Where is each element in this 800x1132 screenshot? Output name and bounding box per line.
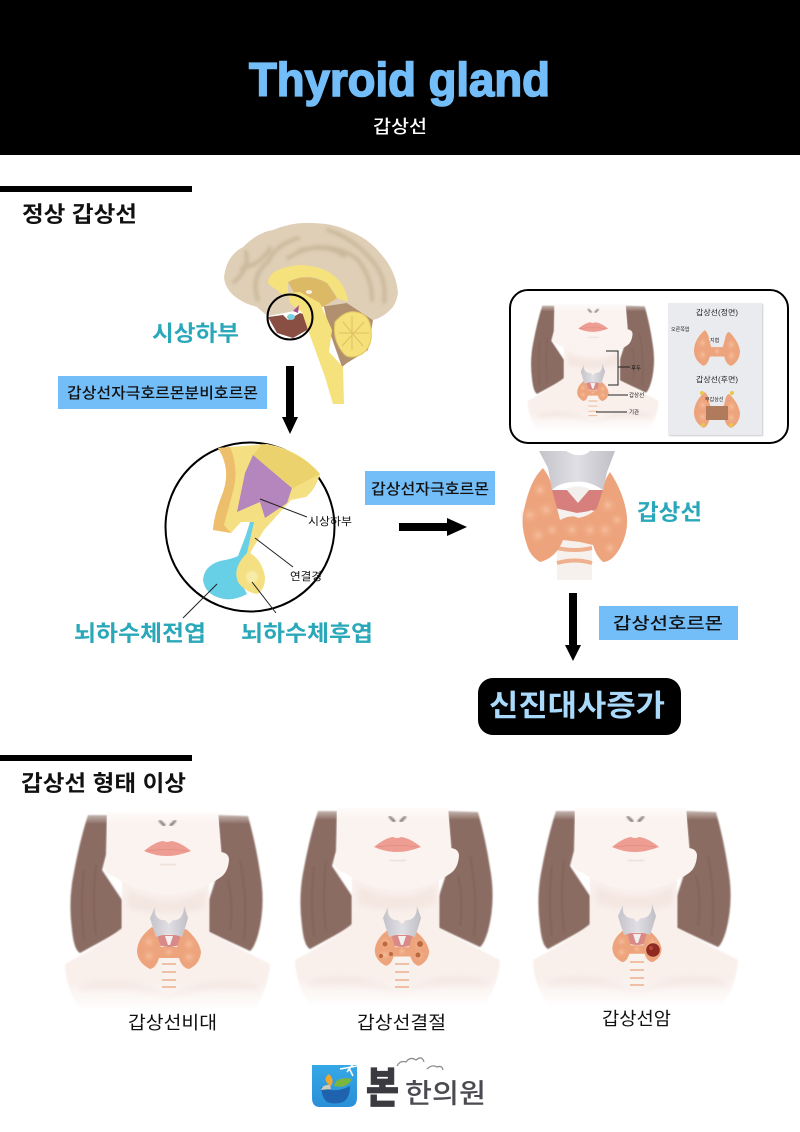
pituitary and stalk [203,444,320,599]
hormone box: TSH: 갑상선자극호르몬 [371,481,489,498]
illustration: brain [224,223,398,404]
hormone box: TRH: 갑상선자극호르몬분비호르몬 [67,385,258,402]
label: posterior pituitary: 뇌하수체후엽 [241,621,373,646]
label: hypothalamus small: 시상하부 [308,514,352,528]
wordmark: 본 [366,1065,399,1113]
panel: thyroid location inset [510,290,788,443]
panel: magnified pituitary circle [166,442,352,618]
panel: front and back views: 부갑상선 [705,396,724,403]
label: thyroid: 갑상선 [637,500,702,525]
callout: metabolism increase [478,678,681,735]
neck figure [518,300,672,432]
panel: front and back views: 지협 [710,337,719,344]
section heading: normal thyroid [0,186,192,227]
illustration: enlarged thyroid [520,451,627,580]
leader lines [183,499,307,618]
panel: thyroid location inset: 기관 [629,408,639,416]
icon: bowl with leaves [312,1064,357,1107]
section heading: thyroid abnormalities [0,755,192,796]
section heading: normal thyroid: 정상 갑상선 [22,202,137,227]
subtitle: 갑상선 [373,117,427,137]
arrow: down to metabolism [565,593,581,661]
hormone box: TSH [365,471,495,505]
hormone box: thyroid hormone: 갑상선호르몬 [613,614,723,633]
label: goiter: 갑상선비대 [128,1013,217,1033]
title: Thyroid gland [249,53,550,106]
panel: front and back views: 오른쪽엽 [671,326,689,333]
label: nodule: 갑상선결절 [357,1013,446,1033]
panel: front and back views [668,303,763,436]
section heading: thyroid abnormalities: 갑상선 형태 이상 [21,771,186,796]
pointer circle [268,294,312,340]
panel: thyroid location inset: 갑상선 [629,391,644,399]
label: hypothalamus: 시상하부 [152,321,239,346]
arrow: down to pituitary [282,366,298,434]
logo: 한의원 [405,1079,486,1109]
figure: nodule [280,802,520,1008]
logo [312,1058,486,1113]
label: anterior pituitary: 뇌하수체전엽 [74,621,206,646]
label: stalk: 연결경 [290,570,322,583]
figure: goiter [50,806,290,1012]
panel: front and back views: 갑상선(정면) [696,307,739,317]
panel: front and back views: 갑상선(후면) [696,374,739,384]
hormone box: TRH [58,376,267,409]
callout: metabolism increase: 신진대사증가 [489,690,665,723]
label: thyroid cancer: 갑상선암 [602,1009,671,1029]
panel: thyroid location inset: 후두 [631,365,641,372]
hormone box: thyroid hormone [599,606,738,640]
figure: thyroid cancer [518,802,758,1008]
header banner [0,0,800,155]
annotation lines [596,351,630,412]
clouds [397,1058,443,1070]
arrow: right to thyroid [399,518,467,536]
